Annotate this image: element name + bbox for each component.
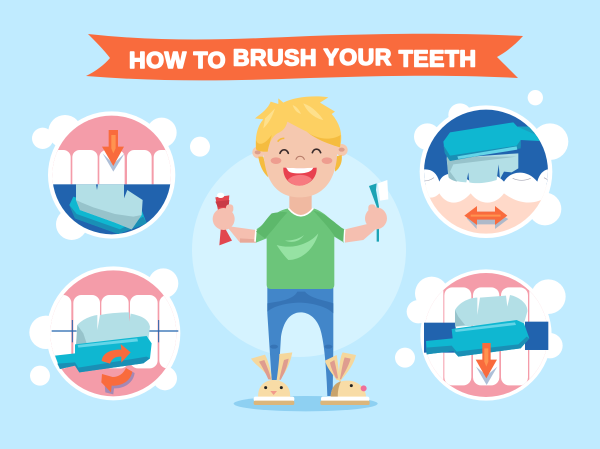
toothbrush xyxy=(369,180,388,242)
right slipper xyxy=(320,352,370,405)
boy: legs and slippers xyxy=(234,283,378,411)
mouth xyxy=(283,168,317,186)
cheeks xyxy=(271,157,281,164)
title text: BRUSH xyxy=(233,44,317,70)
panel: circular brushing xyxy=(29,265,187,402)
panel: brush down upper teeth xyxy=(32,110,210,240)
boy: upper body xyxy=(213,96,388,289)
hair xyxy=(255,96,341,152)
floor shadow xyxy=(234,396,378,411)
eyes xyxy=(280,149,321,153)
arrow: down xyxy=(476,343,497,385)
shirt xyxy=(255,208,345,289)
toothbrush xyxy=(447,153,518,183)
title text: HOW TO xyxy=(129,47,226,73)
title text: YOUR xyxy=(323,44,392,70)
arrow: down xyxy=(102,130,125,172)
arrows: rotate xyxy=(101,344,135,394)
face xyxy=(263,120,337,197)
jeans xyxy=(267,283,333,396)
back hair xyxy=(258,157,268,177)
toothpaste tube xyxy=(215,193,232,245)
panel: brush down outer teeth xyxy=(395,268,566,402)
title banner xyxy=(86,34,523,80)
hands xyxy=(213,208,235,230)
panel: brush back and forth on lower teeth xyxy=(414,90,568,242)
left slipper xyxy=(251,352,294,405)
arms xyxy=(228,227,256,243)
ears xyxy=(252,146,264,158)
toothbrush xyxy=(455,295,527,327)
toothbrush xyxy=(77,312,150,345)
toothbrush xyxy=(69,197,147,234)
arrow: left-right xyxy=(464,206,508,229)
background circle behind boy xyxy=(192,143,406,357)
neck xyxy=(289,192,312,217)
title text: TEETH xyxy=(399,46,476,72)
nose xyxy=(296,156,304,159)
